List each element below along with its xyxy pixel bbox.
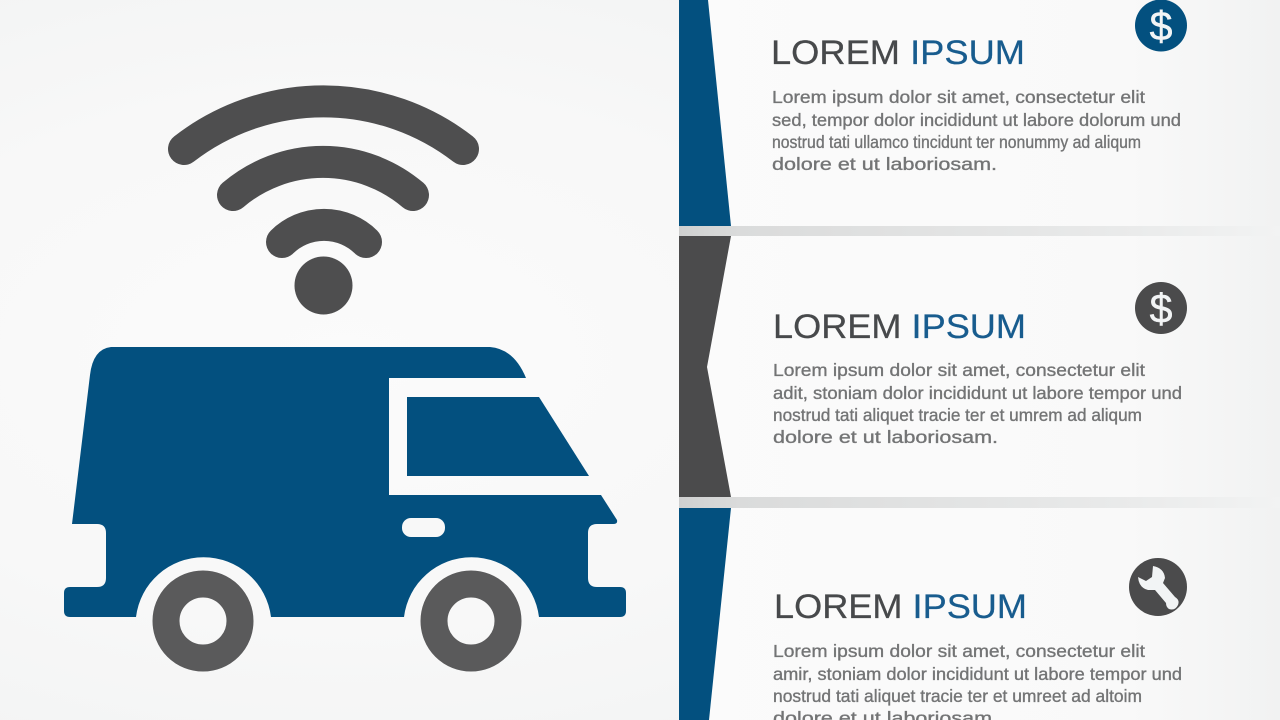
panel marker: grey bbox=[679, 236, 731, 497]
icon: dollar: $ bbox=[1150, 3, 1173, 49]
icon: dollar bbox=[1135, 282, 1187, 334]
body text: nostrud tati ullamco tincidunt ter nonummy ad aliqum bbox=[772, 132, 1141, 152]
body text bbox=[773, 641, 1182, 720]
body text: dolore et ut laboriosam. bbox=[773, 427, 998, 447]
body text: nostrud tati aliquet tracie ter et umreet ad altoim bbox=[773, 686, 1142, 706]
panel marker: blue bbox=[679, 0, 731, 226]
van door handle bbox=[402, 518, 445, 537]
panel marker: blue bbox=[679, 508, 731, 720]
body text: nostrud tati aliquet tracie ter et umrem ad aliqum bbox=[773, 405, 1142, 425]
body text: dolore et ut laboriosam. bbox=[772, 154, 997, 174]
panel: third item bbox=[679, 508, 1187, 720]
body text: sed, tempor dolor incididunt ut labore dolorum und bbox=[772, 110, 1181, 130]
rear wheel bbox=[166, 584, 240, 658]
body text: Lorem ipsum dolor sit amet, consectetur elit bbox=[773, 641, 1145, 661]
heading: LOREM IPSUM bbox=[774, 588, 1027, 626]
front wheel bbox=[434, 584, 508, 658]
body text: amir, stoniam dolor incididunt ut labore tempor und bbox=[773, 664, 1182, 684]
icon: wrench bbox=[1129, 558, 1187, 616]
heading: LOREM IPSUM bbox=[773, 308, 1026, 346]
body text: Lorem ipsum dolor sit amet, consectetur elit bbox=[772, 87, 1145, 107]
icon: delivery van bbox=[64, 347, 626, 658]
panel: second item bbox=[679, 236, 1187, 497]
divider bars bbox=[679, 226, 1280, 508]
panel: first item bbox=[679, 0, 1187, 226]
heading: LOREM IPSUM bbox=[771, 34, 1025, 72]
icon: dollar: $ bbox=[1150, 286, 1173, 332]
body text bbox=[772, 87, 1181, 174]
icon: dollar bbox=[1135, 0, 1187, 52]
icon: wifi signal bbox=[184, 101, 463, 315]
body text bbox=[773, 360, 1182, 447]
van window bbox=[407, 397, 589, 476]
body text: adit, stoniam dolor incididunt ut labore tempor und bbox=[773, 383, 1182, 403]
body text: Lorem ipsum dolor sit amet, consectetur elit bbox=[773, 360, 1145, 380]
